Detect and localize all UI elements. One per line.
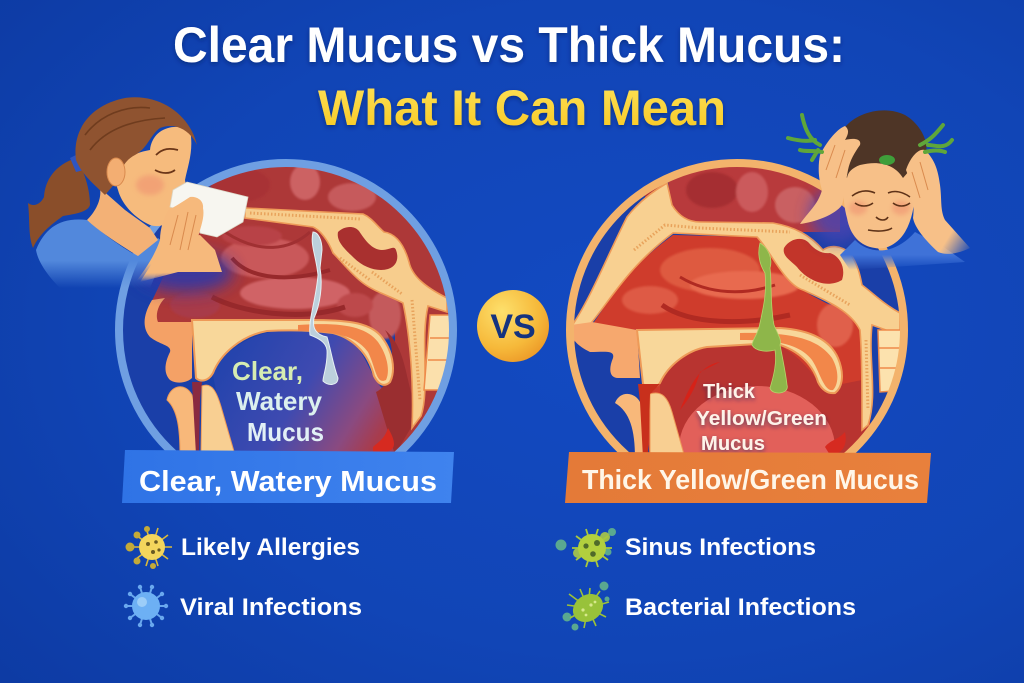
- tissue folds: [170, 164, 401, 339]
- hand right: [906, 150, 970, 254]
- in-circle label right: Yellow/Green: [696, 408, 827, 430]
- illustration: boy with headache: [788, 110, 970, 270]
- vs badge: VS: [490, 308, 536, 346]
- top bone band: [571, 183, 900, 430]
- icon: yellow allergen virus: [126, 526, 172, 569]
- in-circle label left: Clear,: [232, 356, 303, 386]
- arm: [140, 235, 222, 282]
- tissue: [170, 182, 248, 237]
- hair: [75, 97, 197, 195]
- fingers left: [826, 145, 845, 178]
- title: What It Can Mean: [318, 80, 726, 136]
- spine: [423, 314, 449, 391]
- panel: thick mucus anatomy circle: [566, 159, 908, 453]
- fade behind arm: [137, 252, 233, 292]
- face: [843, 154, 915, 248]
- nose lower: [570, 322, 640, 378]
- neck: [87, 188, 158, 256]
- banner: clear, watery mucus: [122, 450, 454, 503]
- blush: [136, 175, 164, 195]
- list item: viral infections: Viral Infections: [180, 594, 362, 621]
- list item: sinus infections: [556, 528, 816, 567]
- in-circle label left: Mucus: [247, 417, 324, 447]
- lower jaw right: [615, 394, 643, 452]
- panel: clear mucus anatomy circle: [115, 159, 457, 452]
- green sprig right: [920, 125, 952, 152]
- frontal sinus: [645, 186, 660, 198]
- red spot right: [825, 432, 846, 455]
- purple fade near boy: [810, 187, 866, 243]
- in-circle label right: [696, 381, 827, 455]
- banner: thick yellow/green mucus: Thick Yellow/Green Mucus: [582, 464, 919, 495]
- ear: [107, 158, 125, 186]
- hand left: [800, 126, 860, 224]
- nasal cavity red: [592, 235, 872, 460]
- lower jaw: [166, 386, 196, 450]
- list item: likely allergies: [126, 526, 360, 569]
- clear mucus drip: [310, 232, 338, 384]
- sinus pocket right: [784, 239, 843, 284]
- mouth cavity: [214, 332, 402, 452]
- cavity folds: [622, 248, 853, 347]
- hair tie: [70, 154, 84, 172]
- facial features: [852, 191, 910, 231]
- green mucus drip: [752, 243, 787, 393]
- icon: green bacterium: [562, 582, 610, 630]
- icon: green sinus virus: [556, 528, 616, 567]
- vs badge: [477, 290, 549, 362]
- red spot: [373, 428, 394, 452]
- palate right: [637, 328, 842, 393]
- list item: viral infections: [124, 585, 362, 627]
- shirt: [840, 232, 965, 270]
- list item: sinus infections: Sinus Infections: [625, 534, 816, 561]
- top folds: [686, 172, 815, 223]
- green specks on hair: [879, 155, 895, 165]
- face: [116, 127, 191, 226]
- spine right: [877, 329, 900, 393]
- palate orange soft tissue right: [740, 333, 837, 390]
- fingers right: [912, 162, 928, 198]
- sinus bone band: [245, 208, 447, 428]
- bone texture: [250, 213, 420, 400]
- hair: [840, 110, 926, 178]
- hand: [137, 197, 203, 280]
- icon: blue virus: [124, 585, 168, 627]
- in-circle label right: Thick: [703, 381, 756, 403]
- banner: thick yellow/green mucus: [565, 452, 931, 503]
- title: [173, 17, 845, 136]
- mouth and tongue: [660, 346, 868, 453]
- palate: [192, 320, 393, 385]
- in-circle label right: Mucus: [701, 433, 765, 455]
- shirt: [36, 220, 168, 288]
- red nasal tissue: [152, 167, 448, 446]
- green sprig left: [788, 115, 822, 160]
- banner: clear, watery mucus: Clear, Watery Mucus: [139, 466, 437, 498]
- circle ring: [119, 163, 453, 497]
- title: Clear Mucus vs Thick Mucus:: [173, 17, 845, 73]
- list item: bacterial infections: Bacterial Infections: [625, 594, 856, 621]
- in-circle label left: [232, 356, 324, 447]
- nose: [145, 298, 192, 383]
- palate orange soft tissue: [298, 324, 388, 381]
- sinus pocket: [338, 227, 397, 270]
- throat: [376, 330, 412, 452]
- red tissue top: [668, 167, 840, 232]
- list item: bacterial infections: [562, 582, 856, 630]
- circle ring right: [570, 163, 904, 497]
- list item: likely allergies: Likely Allergies: [181, 534, 360, 561]
- in-circle label left: Watery: [236, 386, 323, 416]
- ponytail: [28, 158, 90, 248]
- eye and brow: [155, 149, 178, 173]
- blush: [849, 201, 910, 215]
- illustration: woman blowing nose: [28, 97, 248, 288]
- bone texture right: [634, 225, 868, 410]
